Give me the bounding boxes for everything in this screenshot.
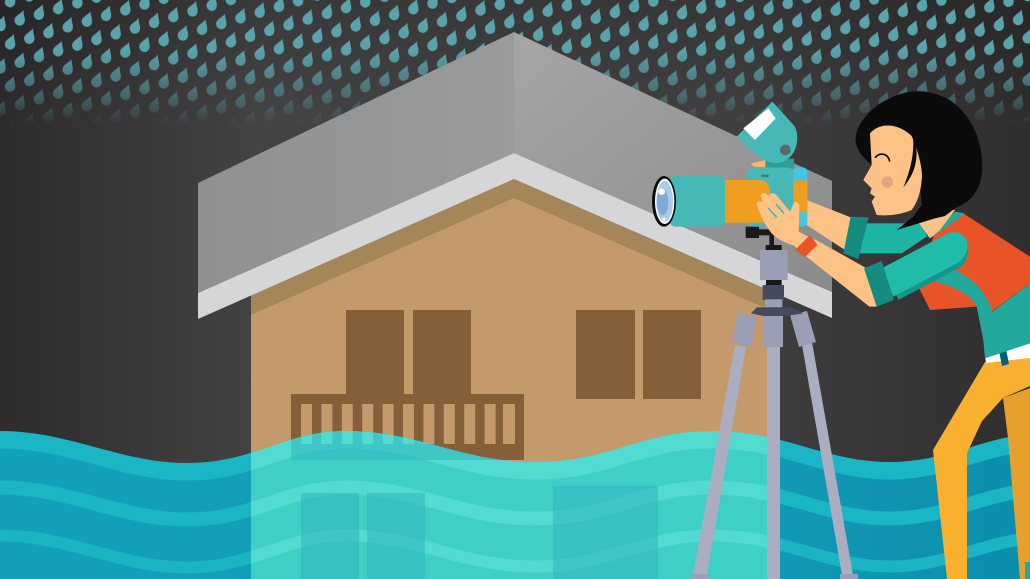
- cheek: [882, 176, 893, 188]
- person and camera: [652, 91, 1030, 358]
- flood water outside the house: [0, 431, 1030, 579]
- roof: [198, 32, 832, 319]
- rain drops: [0, 0, 1030, 125]
- tripod head: [746, 227, 803, 316]
- submerged door and windows: [301, 486, 658, 579]
- camera: [652, 102, 807, 316]
- wristband: [795, 235, 817, 257]
- far arm: [807, 200, 927, 259]
- orange trousers: [933, 352, 1030, 579]
- flash: [737, 102, 797, 169]
- collar strip: [927, 212, 965, 237]
- hand: [757, 193, 815, 256]
- near arm: [757, 193, 968, 307]
- hair lock: [903, 135, 917, 187]
- head: [856, 91, 982, 230]
- tripod legs: [691, 311, 858, 579]
- belt: [985, 342, 1030, 366]
- hair: [856, 91, 982, 230]
- lens glass: [652, 176, 676, 227]
- eye: [875, 154, 890, 162]
- upper left windows: [346, 310, 471, 396]
- house wall: [251, 179, 770, 470]
- submerged balcony: [291, 431, 502, 460]
- torso: [932, 268, 1030, 358]
- face: [863, 126, 922, 215]
- house: [198, 32, 832, 470]
- upper right windows: [576, 310, 701, 399]
- neck: [917, 208, 955, 238]
- vest: [918, 213, 1030, 312]
- balcony railing: [291, 394, 524, 460]
- flood water over the house: [251, 431, 767, 579]
